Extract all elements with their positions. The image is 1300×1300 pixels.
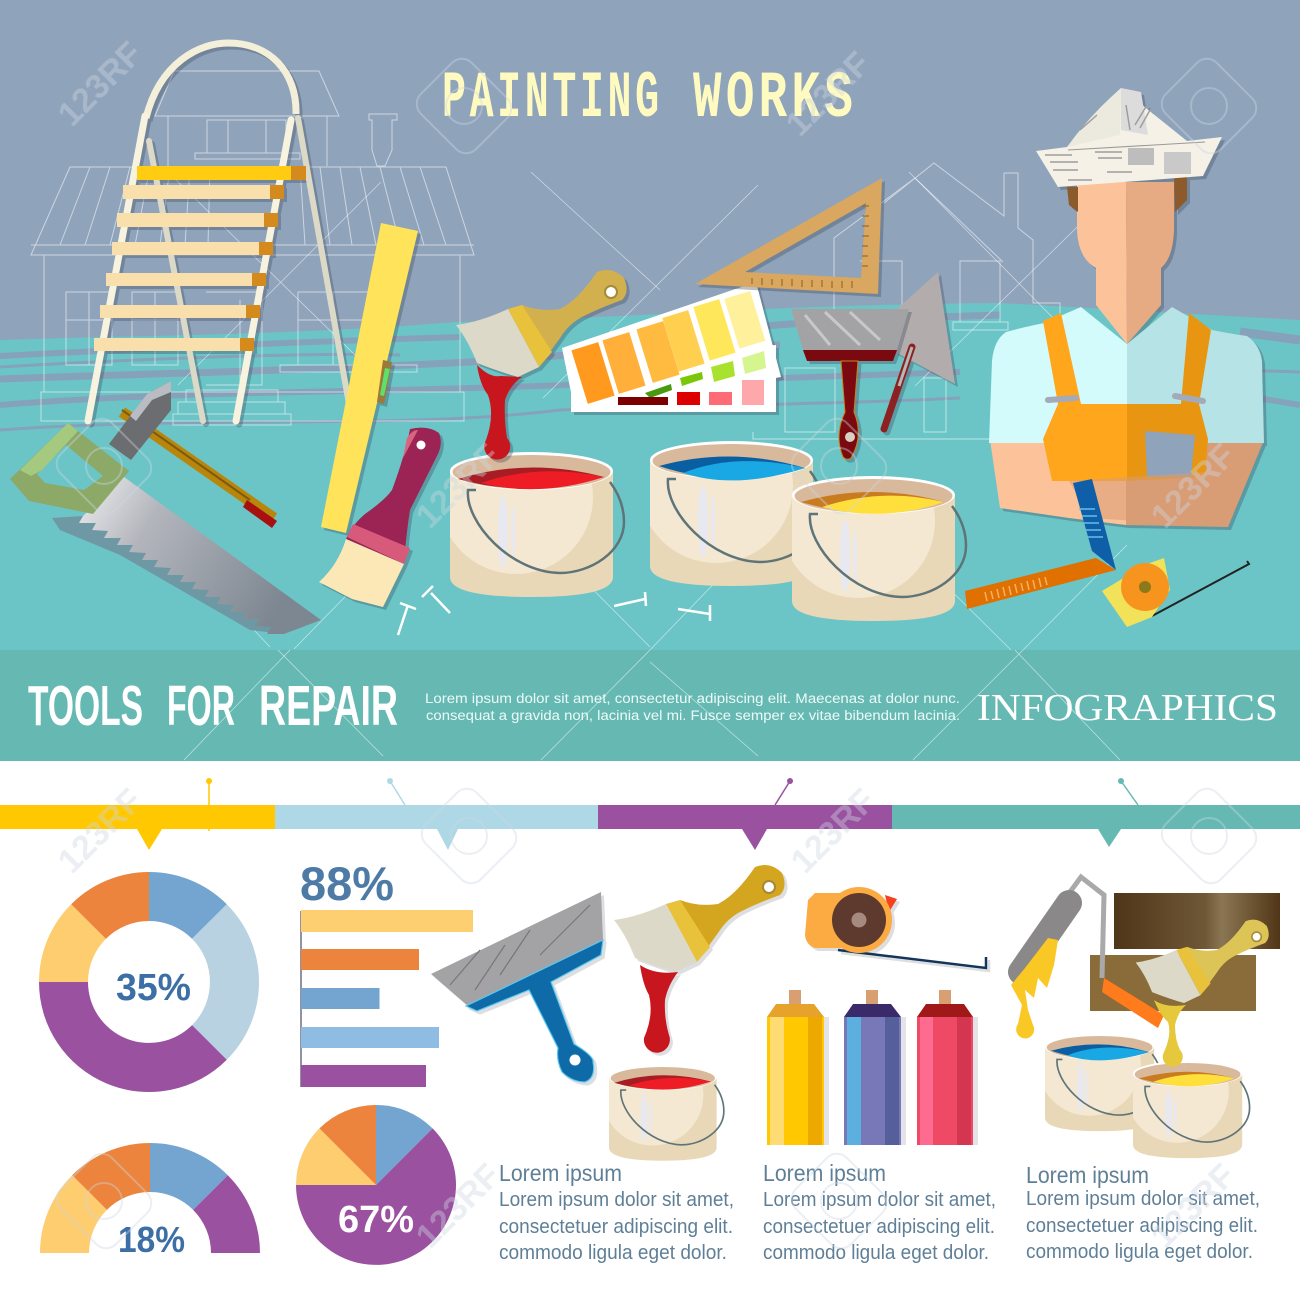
banner diagonal lines [184,650,1120,760]
figure: newspaper hat [1036,88,1222,187]
banner description: Lorem ipsum dolor sit amet, consectetur adipiscing elit. Maecenas at dolor nunc. [425,691,960,706]
icon: brush dripping red paint [456,270,627,460]
text block 3: Lorem ipsum [1026,1162,1149,1188]
icon: nails [398,586,710,635]
icon: scraper with dark red paint [791,309,909,459]
icon: trowel [884,272,955,429]
thin diagonal construction lines [170,172,1127,650]
spray can: yellow [767,990,829,1145]
icon: purple paint brush [319,428,441,607]
figure: neck and face [1077,182,1127,344]
figure: hair [1067,177,1187,212]
wood plank: light [1090,955,1256,1011]
floor brush strokes [0,315,1300,430]
sky background [0,0,1300,345]
text block 3 [1026,1162,1260,1263]
text block 1: Lorem ipsum dolor sit amet, [499,1189,734,1211]
half donut chart 18%: 18% [118,1219,185,1260]
figure: arms [990,440,1126,525]
paint bucket: yellow [781,444,966,621]
banner [0,650,1300,761]
figure: shirt [989,307,1127,443]
text block 2: commodo ligula eget dolor. [763,1242,989,1264]
paint bucket: small red [602,1044,724,1161]
spray can: red [917,990,978,1145]
bar chart 88%: 88% [300,857,394,910]
section pins [206,778,1138,831]
banner infographics label: INFOGRAPHICS [977,687,1278,729]
icon: hand saw [10,423,321,634]
text block 1 [499,1160,734,1264]
icon: step ladder [88,43,352,421]
half donut chart 18% [40,1143,260,1260]
paint bucket: red [439,420,624,597]
banner heading: TOOLS [28,674,143,738]
figure: overalls [1043,313,1127,481]
teal floor [0,303,1300,650]
stock watermarks: 123RF [409,437,508,536]
text block 1: consectetuer adipiscing elit. [499,1216,733,1238]
text block 2 [763,1160,996,1264]
stock watermarks: 123RF [409,1157,508,1256]
banner description [425,691,960,723]
banner heading [28,674,398,738]
house blueprint left [31,71,474,425]
text block 3: consectetuer adipiscing elit. [1026,1215,1258,1237]
title: WORKS [693,62,857,137]
text block 2: Lorem ipsum dolor sit amet, [763,1189,996,1211]
text block 1: commodo ligula eget dolor. [499,1242,727,1264]
stock watermarks: 123RF [51,782,150,881]
icon: blue putty knife [431,892,603,1082]
icon: colour swatch fan [562,282,781,412]
stock watermarks: 123RF [51,35,150,134]
figure: folded arm shade [1069,472,1228,527]
text block 3: commodo ligula eget dolor. [1026,1241,1253,1263]
painter figure [989,88,1264,527]
pie chart 67% [296,1105,456,1265]
icon: tape measure [1102,558,1249,627]
text block 3: Lorem ipsum dolor sit amet, [1026,1188,1260,1210]
figure: strap buckles [1048,396,1203,401]
banner heading: FOR [167,674,235,738]
house blueprint right [753,163,1060,439]
section bar [0,805,1300,850]
figure: overall pocket [1145,431,1195,477]
donut chart 35%: 35% [116,967,191,1009]
banner description: consequat a gravida non, lacinia vel mi. Fusce semper ex vitae bibendum lacinia. [426,708,960,723]
icon: paint roller [1011,877,1164,1038]
bar chart 88% [300,857,473,1087]
title [442,62,857,137]
icon: brush dripping red paint, lower [614,865,785,1053]
paint bucket: small blue [1038,1013,1162,1131]
text block 2: consectetuer adipiscing elit. [763,1216,995,1238]
donut chart 35% [39,872,259,1092]
icon: carpenter square [965,479,1116,609]
stock watermarks: 123RF [779,45,878,144]
banner heading: REPAIR [259,674,398,738]
stock watermarks: 123RF [1144,437,1243,536]
pie chart 67%: 67% [338,1199,414,1241]
text block 2: Lorem ipsum [763,1160,886,1186]
stock watermarks: 123RF [784,782,883,881]
paint bucket: small yellow [1126,1040,1250,1158]
icon: hammer [109,381,277,528]
wood plank: dark [1114,893,1280,949]
stock watermarks: 123RF [1144,1157,1243,1256]
icon: triangle ruler [695,178,882,294]
icon: spirit level [321,223,418,533]
section markers [137,829,162,850]
paint bucket: blue [639,409,824,586]
icon: brush dripping yellow paint [1136,920,1269,1067]
spray can: purple [844,990,906,1145]
title: PAINTING [442,63,663,137]
text block 1: Lorem ipsum [499,1160,622,1186]
icon: orange tape measure [805,887,986,968]
